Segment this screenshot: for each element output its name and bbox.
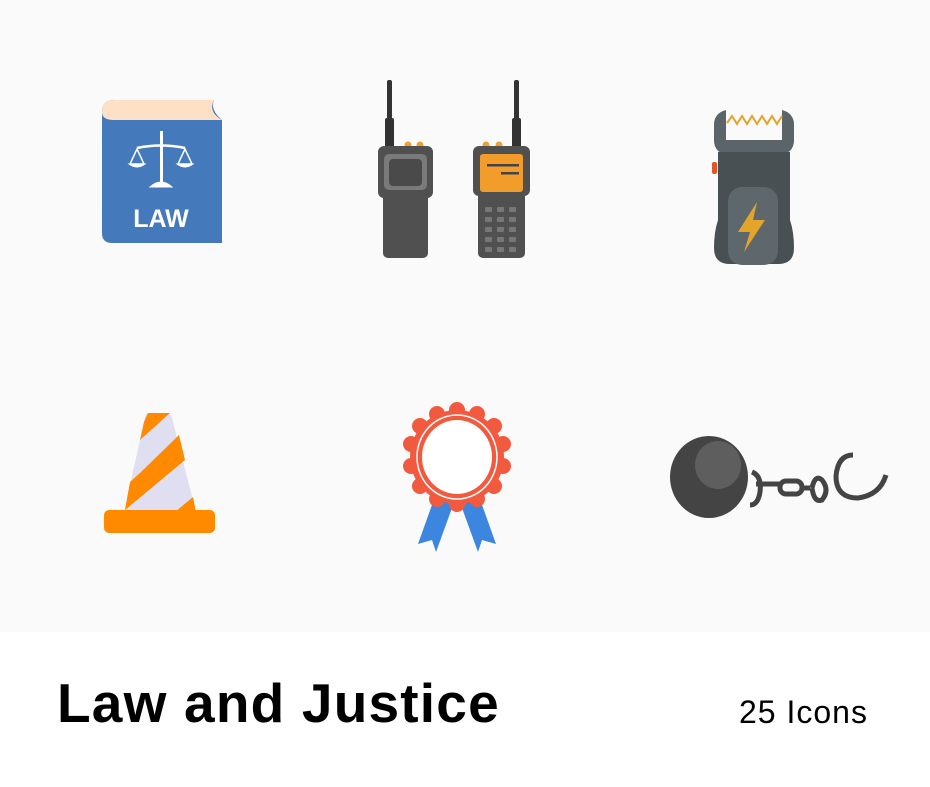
icon: law book: LAW [133,205,189,233]
icon: ball and chain [670,436,886,518]
icon: law book [102,100,222,243]
title: Law and Justice [57,672,500,734]
icon: award ribbon [403,402,511,552]
icon: traffic cone [104,413,215,533]
icon: walkie talkies [378,80,530,258]
icon: taser [712,108,794,265]
icon count: 25 Icons [739,694,868,730]
